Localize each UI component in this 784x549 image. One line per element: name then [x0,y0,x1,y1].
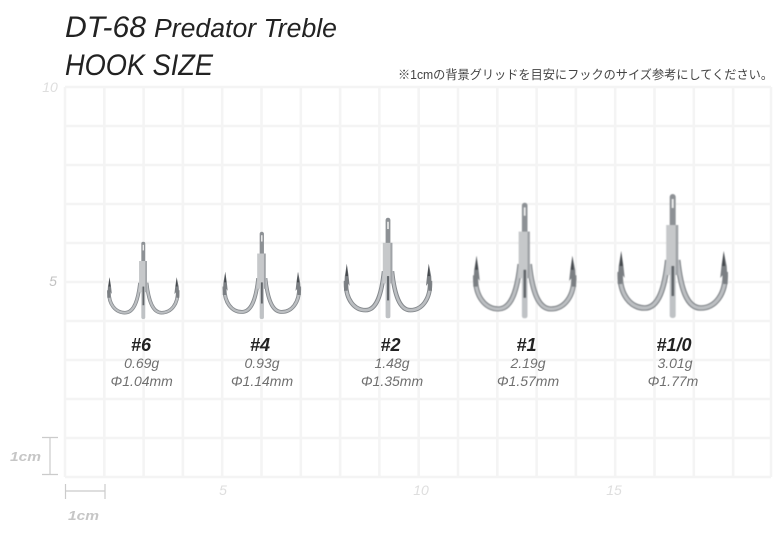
horizontal axis numbers: 15 [606,482,622,498]
weight and diameter #1: 2.19g [509,355,546,371]
note about grid: ※1cmの背景グリッドを目安にフックのサイズ参考にしてください。 [398,67,773,82]
size label #1/0: #1/0 [656,335,692,355]
hook #1/0 [618,194,728,389]
title: DT-68 [65,11,146,44]
vertical axis numbers: 5 [49,273,57,289]
weight and diameter #4: 0.93g [244,355,280,371]
vertical 1cm scale: 1cm [10,449,42,464]
icon: hook #1 [473,203,576,318]
horizontal axis numbers: 10 [413,482,429,498]
size label #4: #4 [250,335,270,355]
weight and diameter #4 [231,355,293,389]
weight and diameter #2 [361,355,423,389]
title [65,11,337,82]
icon: hook #1/0 [618,194,728,318]
hook #4 [223,232,301,389]
horizontal axis numbers [219,482,622,498]
hook #2 [344,218,432,389]
size label #1: #1 [516,335,537,355]
size label #2: #2 [380,335,401,355]
weight and diameter #1: Φ1.57mm [497,373,559,389]
weight and diameter #6: 0.69g [124,355,159,371]
vertical axis numbers [42,79,58,289]
weight and diameter #1/0: Φ1.77m [648,373,699,389]
weight and diameter #1/0 [648,355,699,389]
size label #6: #6 [131,335,152,355]
weight and diameter #4: Φ1.14mm [231,373,293,389]
title: Predator Treble [154,15,337,43]
vertical axis numbers: 10 [42,79,58,95]
weight and diameter #2: 1.48g [374,355,410,371]
icon: hook #6 [107,242,179,319]
weight and diameter #6: Φ1.04mm [111,373,173,389]
icon: hook #2 [344,218,432,318]
vertical 1cm scale [10,438,58,474]
horizontal axis numbers: 5 [219,482,227,498]
weight and diameter #1/0: 3.01g [657,355,693,371]
horizontal 1cm scale: 1cm [68,508,100,523]
weight and diameter #6 [111,355,173,389]
weight and diameter #2: Φ1.35mm [361,373,423,389]
hook #6 [107,242,179,389]
weight and diameter #1 [497,355,559,389]
icon: hook #4 [223,232,301,319]
title: HOOK SIZE [65,49,214,82]
background grid [65,87,771,477]
horizontal 1cm scale [66,484,105,523]
hook #1 [473,203,576,389]
